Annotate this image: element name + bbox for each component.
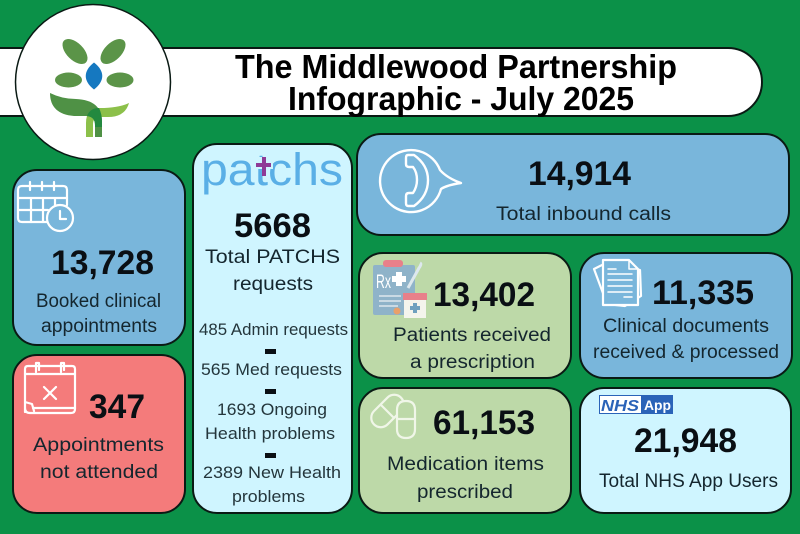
panel: total inbound calls: 14,914: [528, 155, 631, 193]
panel: patients received a prescription: [359, 253, 571, 378]
title banner: [0, 48, 762, 117]
panel: clinical documents: Clinical documents: [603, 316, 769, 337]
panel: PATCHS requests: problems: [232, 487, 305, 506]
icon: pills: [367, 391, 415, 438]
icon: NHS App logo: App: [644, 397, 671, 413]
panel: medication items prescribed: prescribed: [417, 482, 513, 503]
title: The Middlewood Partnership: [235, 48, 677, 85]
panel: clinical documents: [580, 253, 792, 378]
panel: appointments not attended: [13, 355, 185, 513]
panel: booked clinical appointments: Booked clinical: [36, 291, 161, 312]
panel: appointments not attended: Appointments: [33, 435, 164, 456]
title: Infographic - July 2025: [288, 80, 634, 117]
icon: prescription clipboard: Rx: [376, 272, 391, 293]
panel: booked clinical appointments: appointments: [41, 316, 157, 337]
panel: patients received a prescription: a prescription: [410, 352, 535, 373]
icon: calendar with cross: [25, 363, 75, 413]
icon: patchs logo: patchs: [201, 144, 343, 195]
panel: patients received a prescription: Patients received: [393, 325, 551, 346]
panel: NHS App users: Total NHS App Users: [599, 471, 778, 492]
icon: phone speech bubble: [380, 150, 461, 212]
icon: prescription clipboard: [373, 260, 427, 318]
panel: patients received a prescription: 13,402: [433, 276, 535, 314]
title: [235, 48, 677, 117]
panel: appointments not attended: 347: [89, 388, 145, 426]
icon: calendar with clock: [18, 182, 73, 231]
panel: PATCHS requests: 2389 New Health: [203, 463, 341, 482]
panel: PATCHS requests: 565 Med requests: [201, 360, 342, 379]
panel: total inbound calls: Total inbound calls: [496, 204, 671, 225]
panel: NHS App users: [580, 388, 791, 513]
panel: booked clinical appointments: 13,728: [51, 244, 154, 282]
icon: NHS App logo: [599, 395, 673, 415]
icon: documents: [594, 260, 641, 306]
panel: booked clinical appointments: [13, 170, 185, 345]
panel: PATCHS requests: Total PATCHS: [205, 247, 340, 268]
panel: PATCHS requests: requests: [233, 274, 313, 295]
panel: PATCHS requests: 485 Admin requests: [199, 320, 348, 339]
icon: NHS App logo: NHS: [601, 398, 639, 415]
panel: medication items prescribed: 61,153: [433, 404, 535, 442]
panel: PATCHS requests: 1693 Ongoing: [217, 400, 327, 419]
panel: clinical documents: 11,335: [652, 274, 754, 312]
panel: total inbound calls: [357, 134, 789, 235]
logo circle: [16, 4, 170, 160]
panel: PATCHS requests: [193, 144, 352, 513]
panel: clinical documents: received & processed: [593, 342, 779, 363]
panel: PATCHS requests: Health problems: [205, 424, 335, 443]
panel: NHS App users: 21,948: [634, 422, 737, 460]
panel: medication items prescribed: Medication items: [387, 454, 544, 475]
panel: appointments not attended: not attended: [40, 462, 158, 483]
panel: PATCHS requests: 5668: [234, 207, 311, 245]
panel: medication items prescribed: [359, 388, 571, 513]
